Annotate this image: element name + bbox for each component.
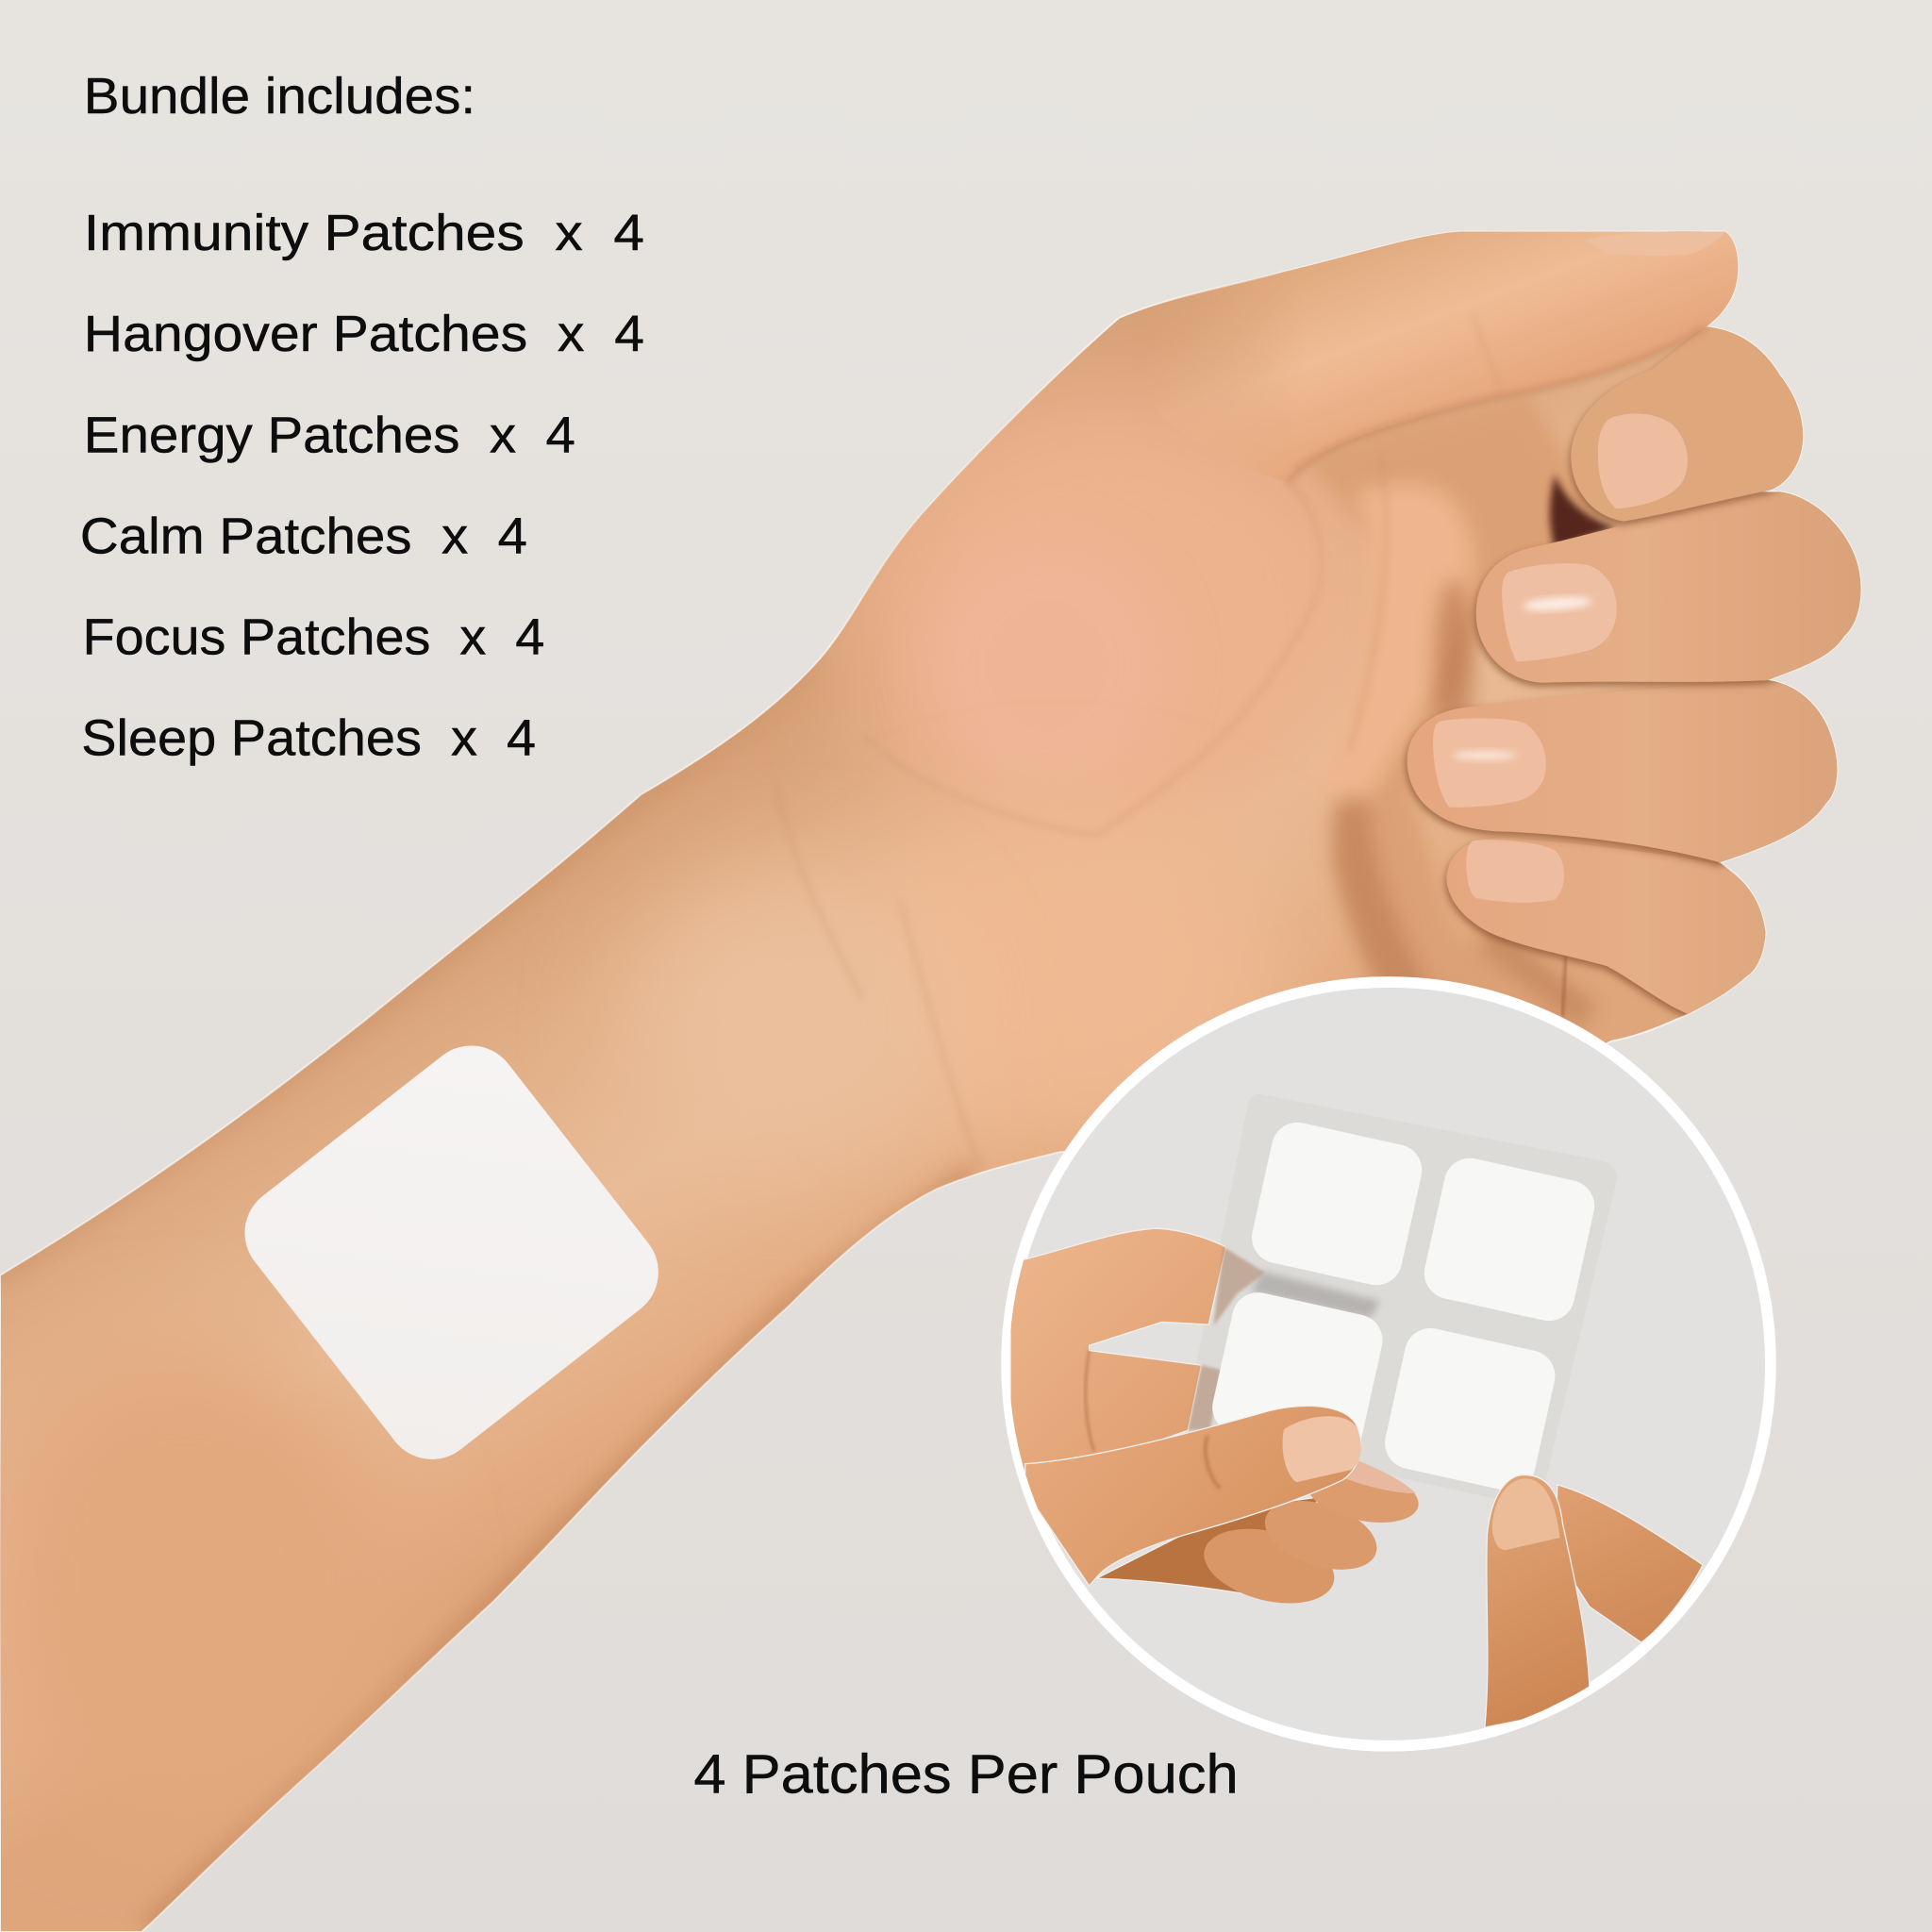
nail: middle <box>1502 563 1617 661</box>
nail: ring <box>1433 718 1546 808</box>
list item: energy: Energy Patches x 4 <box>84 408 575 463</box>
small patches <box>1208 1118 1599 1496</box>
grey gap band on backing <box>1251 1272 1380 1319</box>
nail: thumb <box>1585 231 1725 256</box>
dark wedge between fingers <box>1550 475 1617 550</box>
list item: focus: Focus Patches x 4 <box>83 610 544 666</box>
list item: calm: Calm Patches x 4 <box>80 508 527 564</box>
patch on arm <box>225 1026 677 1478</box>
transparent backing sheet <box>1183 1094 1617 1506</box>
left hand: thumb <box>1025 1406 1360 1586</box>
caption: patches per pouch: 4 Patches Per Pouch <box>693 1743 1239 1805</box>
front finger nail <box>1492 1478 1560 1550</box>
left hand: three curled fingers <box>1196 1457 1424 1616</box>
finger seen through sheet <box>1188 1247 1265 1430</box>
palm creases <box>1096 456 1387 836</box>
circle background and ring <box>1007 982 1771 1746</box>
right hand: back finger <box>1555 1485 1703 1642</box>
right hand: front finger <box>1485 1474 1590 1727</box>
pinky finger <box>1446 838 1766 1014</box>
list item: hangover: Hangover Patches x 4 <box>84 307 644 362</box>
finger bases and palm fold <box>1317 400 1598 972</box>
middle finger <box>1476 491 1861 683</box>
list item: immunity: Immunity Patches x 4 <box>84 206 644 261</box>
heading: bundle includes: Bundle includes: <box>84 69 475 125</box>
ring finger <box>1407 680 1837 862</box>
list item: sleep: Sleep Patches x 4 <box>81 711 536 767</box>
left hand: index and middle fingers <box>1010 1228 1226 1478</box>
inset circle <box>1007 982 1771 1746</box>
thumb <box>1118 231 1738 483</box>
list of patches <box>80 206 644 767</box>
nail: index <box>1598 413 1688 508</box>
thumb nail <box>1283 1416 1361 1482</box>
index finger <box>1571 326 1803 521</box>
nail: pinky <box>1466 840 1564 903</box>
left hand: lower finger base <box>1096 1497 1319 1599</box>
